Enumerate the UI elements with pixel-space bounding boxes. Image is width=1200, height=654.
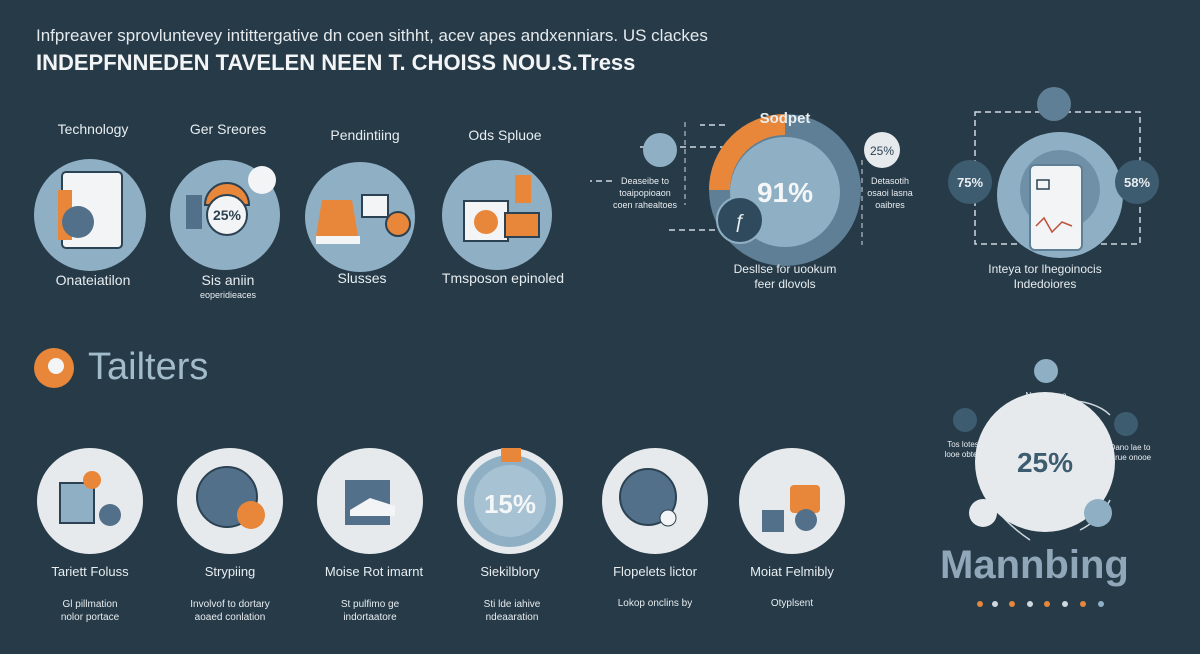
bottom labels: Flopelets lictor: [613, 564, 697, 579]
bottom labels: nolor portace: [61, 612, 119, 623]
top labels: Tmsposon epinoled: [442, 270, 564, 286]
icon: orange tailters: [34, 348, 74, 388]
hub labels: Tos lotes: [947, 440, 979, 449]
chart: phone panel: [948, 87, 1159, 258]
right top labels: toaipopioaon: [619, 188, 671, 198]
panel: top icons: [34, 159, 552, 272]
right top labels: Desllse for uookum: [734, 262, 836, 276]
bottom labels: Moise Rot imarnt: [325, 564, 423, 579]
top labels: [56, 121, 564, 300]
heading: Tailters: Tailters: [88, 346, 208, 388]
top labels: Onateiatilon: [56, 272, 130, 288]
title: INDEPFNNEDEN TAVELEN NEEN T. CHOISS NOU.S.Tress: [36, 50, 635, 75]
bottom labels: Strypiing: [205, 564, 255, 579]
top labels: Sis aniin: [202, 272, 254, 288]
top labels: Slusses: [337, 270, 387, 286]
title: Infpreaver sprovluntevey intittergative dn coen sithht, acev apes andxenniars. US clackes: [36, 26, 708, 45]
top labels: eoperidieaces: [200, 290, 256, 300]
bottom labels: Sti lde iahive: [484, 599, 540, 610]
right top labels: Inteya tor lhegoinocis: [988, 262, 1102, 276]
chart: donut 91%: [590, 114, 900, 266]
bottom labels: St pulfimo ge: [341, 599, 399, 610]
top labels: Ods Spluoe: [468, 127, 542, 143]
panel: bottom icons: [37, 448, 845, 554]
heading: Mannbing: Mannbing: [940, 543, 1129, 587]
bottom labels: Moiat Felmibly: [750, 564, 834, 579]
hub labels: Dano lae to: [1110, 443, 1150, 452]
bottom labels: Otyplsent: [771, 598, 813, 609]
bottom labels: Tariett Foluss: [51, 564, 129, 579]
panel: bottom icons: 15%: [484, 489, 536, 519]
top labels: Ger Sreores: [190, 121, 266, 137]
hub labels: larue onooe: [1109, 453, 1151, 462]
chart: donut 91%: ƒ: [734, 211, 746, 233]
bottom labels: Gl pillmation: [62, 599, 118, 610]
chart: donut 91%: 25%: [870, 144, 894, 158]
chart: 25% hub: [953, 359, 1138, 607]
chart: donut 91%: 91%: [757, 177, 813, 208]
bottom labels: aoaed conlation: [195, 612, 265, 623]
right top labels: coen rahealtoes: [613, 200, 677, 210]
top labels: Pendintiing: [330, 127, 400, 143]
bottom labels: [51, 564, 834, 623]
right top labels: Detasotih: [871, 176, 909, 186]
right top labels: oaibres: [875, 200, 905, 210]
bottom labels: Involvof to dortary: [190, 599, 270, 610]
chart: phone panel: 75%: [957, 175, 983, 190]
title: [36, 26, 708, 75]
right top labels: Deaseibe to: [621, 176, 669, 186]
hub labels: Nw cissoon: [1026, 391, 1066, 400]
top labels: Technology: [58, 121, 128, 137]
bottom labels: Lokop onclins by: [618, 598, 692, 609]
bottom labels: ndeaaration: [486, 612, 538, 623]
chart: 25% hub: 25%: [1017, 447, 1073, 478]
hub labels: [945, 391, 1151, 462]
panel: top icons: 25%: [213, 207, 242, 223]
right top labels: Sodpet: [760, 110, 810, 127]
right top labels: osaoi lasna: [867, 188, 913, 198]
hub labels: looe obtes: [945, 450, 981, 459]
right top labels: Indedoiores: [1014, 277, 1076, 291]
right top labels: feer dlovols: [754, 277, 816, 291]
chart: phone panel: 58%: [1124, 175, 1150, 190]
right top labels: [613, 110, 1102, 291]
bottom labels: indortaatore: [343, 612, 397, 623]
bottom labels: Siekilblory: [480, 564, 540, 579]
